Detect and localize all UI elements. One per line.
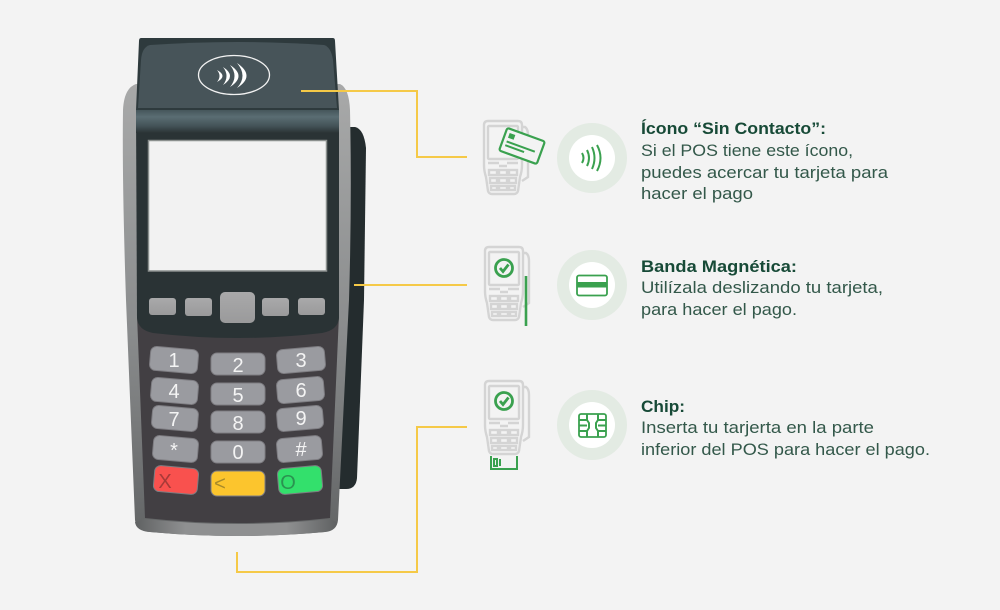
contactless logo [198,56,270,94]
keypad: 3 [295,350,307,372]
function buttons [149,292,325,323]
text: chip: Chip: [641,397,685,416]
keypad: 9 [295,408,307,430]
keypad: 5 [232,385,244,407]
cancel key: X [158,471,172,493]
display screen [148,140,326,271]
magnetic stripe reader [338,127,366,489]
back key [211,471,265,496]
keypad: 7 [168,409,180,431]
bottom bezel [135,519,337,536]
keypad: # [295,439,307,461]
confirm key [277,465,323,495]
text: magnetic stripe: Banda Magnética: [641,257,797,276]
keypad: 4 [168,381,180,403]
text: magnetic stripe: Utilízala deslizando tu tarjeta, [641,278,883,297]
keypad: 6 [295,380,307,402]
text: contactless: hacer el pago [641,184,753,203]
text: contactless: puedes acercar tu tarjeta para [641,163,889,182]
back key: < [214,473,226,495]
icon: magnetic card badge [557,250,627,320]
contactless head [136,38,339,110]
connector: chip [237,427,467,572]
glossy band [136,110,339,133]
text: magnetic stripe [641,257,883,319]
icon: contactless badge [557,123,627,193]
text: chip: Inserta tu tarjerta en la parte [641,418,874,437]
icon: POS with contactless card [484,121,545,194]
keypad: 0 [232,442,244,464]
icon: POS with magnetic swipe [485,247,529,326]
keypad [149,346,326,464]
text: contactless: Ícono “Sin Contacto”: [641,119,826,138]
icon: POS with chip card [485,381,529,469]
keypad body [137,315,339,523]
cancel key [153,465,199,495]
keypad: 8 [232,413,244,435]
screen panel [136,110,339,338]
connector: magnetic stripe [354,284,467,286]
text: magnetic stripe: para hacer el pago. [641,300,797,319]
icon: chip badge [557,390,627,460]
text: contactless [641,119,889,203]
keypad: * [170,440,178,462]
confirm key: O [280,472,296,494]
connector: contactless [301,91,467,157]
POS terminal device [123,38,366,536]
keypad: 1 [168,350,180,372]
text: contactless: Si el POS tiene este ícono, [641,141,853,160]
text: chip: inferior del POS para hacer el pago. [641,440,930,459]
device casing [123,84,351,536]
text: chip [641,397,930,459]
keypad: 2 [232,355,244,377]
